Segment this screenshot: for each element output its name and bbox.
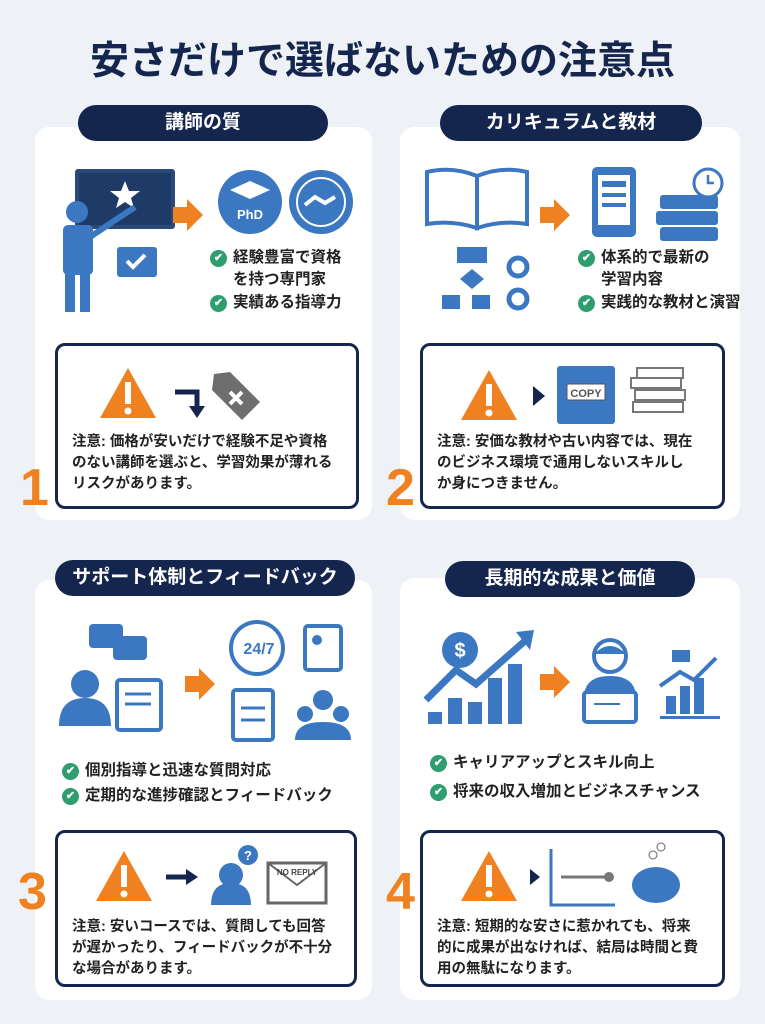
checklist: 個別指導と迅速な質問対応 — [85, 762, 271, 779]
warning box: が遅かったり、フィードバックが不十分 — [72, 940, 332, 956]
checklist — [578, 248, 741, 312]
warning box: 用の無駄になります。 — [437, 961, 581, 977]
panel: カリキュラムと教材 — [400, 127, 740, 520]
warning box — [55, 343, 359, 509]
warning box: 注意: 安価な教材や古い内容では、現在 — [437, 434, 692, 450]
checklist: ✔ — [214, 297, 223, 309]
icon: growth chart — [424, 630, 534, 724]
icon: tablet & books — [592, 167, 724, 241]
heading pill 3 — [55, 560, 355, 596]
checklist: 定期的な進捗確認とフィードバック — [85, 787, 333, 804]
heading pill 4: 長期的な成果と価値 — [484, 568, 656, 589]
checklist: を持つ専門家 — [233, 271, 326, 288]
heading pill 4 — [445, 561, 695, 597]
checklist: 将来の収入増加とビジネスチャンス — [453, 783, 701, 800]
warning box: のビジネス環境で通用しないスキルし — [437, 455, 684, 471]
warning box: NO REPLY — [277, 868, 318, 877]
checklist: ✔ — [434, 786, 443, 798]
heading pill 3: サポート体制とフィードバック — [72, 567, 338, 588]
number 1: 1 — [20, 459, 49, 517]
panel: 講師の質 — [35, 127, 372, 520]
warning box — [55, 830, 357, 987]
warning box — [420, 343, 725, 509]
panel: サポート体制とフィードバック — [35, 580, 372, 1000]
arrow — [173, 199, 203, 231]
number 2: 2 — [386, 459, 415, 517]
arrow — [540, 666, 570, 698]
checklist: ✔ — [66, 765, 75, 777]
warning box — [420, 830, 725, 987]
icon: warning — [100, 368, 260, 420]
icon: PhD & handshake: PhD — [237, 207, 263, 222]
number 4: 4 — [386, 863, 415, 921]
warning box: ? — [244, 848, 252, 863]
warning box: 注意: 安いコースでは、質問しても回答 — [72, 919, 325, 935]
checklist: 経験豊富で資格 — [233, 249, 342, 266]
checklist: キャリアアップとスキル向上 — [453, 754, 655, 771]
panel: 長期的な成果と価値 — [400, 578, 740, 1000]
title: 安さだけで選ばないための注意点 — [90, 40, 675, 83]
checklist: ✔ — [66, 790, 75, 802]
warning box: 的に成果が出なければ、結局は時間と費 — [437, 940, 698, 956]
icon: person & chart — [582, 638, 720, 724]
heading pill 1: 講師の質 — [165, 112, 241, 133]
number 3: 3 — [18, 863, 47, 921]
checklist: ✔ — [434, 757, 443, 769]
heading pill 2: カリキュラムと教材 — [486, 112, 656, 133]
warning box: 注意: 短期的な安さに惹かれても、将来 — [437, 919, 691, 935]
icon: 24/7 etc: 24/7 — [243, 641, 275, 658]
icon: teacher — [63, 169, 175, 312]
checklist: ✔ — [214, 252, 223, 264]
checklist — [430, 754, 701, 801]
heading pill 1 — [78, 105, 328, 141]
arrow — [540, 199, 570, 231]
checklist: 体系的で最新の — [601, 249, 710, 266]
warning box: のない講師を選ぶと、学習効果が薄れる — [72, 455, 332, 471]
icon: book & flowchart — [425, 168, 530, 310]
checklist: ✔ — [582, 297, 591, 309]
icon: PhD & handshake — [218, 170, 353, 234]
warning box: な場合があります。 — [72, 961, 201, 977]
checklist: ✔ — [582, 252, 591, 264]
icon: support — [59, 624, 163, 732]
arrow — [185, 668, 215, 700]
heading pill 2 — [440, 105, 702, 141]
warning box: COPY — [570, 388, 602, 400]
checklist: 実践的な教材と演習 — [601, 294, 741, 311]
checklist — [62, 762, 333, 805]
checklist: 学習内容 — [601, 271, 663, 288]
warning box: 注意: 価格が安いだけで経験不足や資格 — [72, 434, 327, 450]
checklist: 実績ある指導力 — [233, 294, 342, 311]
icon: 24/7 etc — [229, 620, 351, 742]
icon: growth chart: $ — [454, 640, 466, 662]
warning box: リスクがあります。 — [72, 476, 201, 492]
checklist — [210, 248, 342, 312]
warning box: か身につきません。 — [437, 476, 567, 492]
